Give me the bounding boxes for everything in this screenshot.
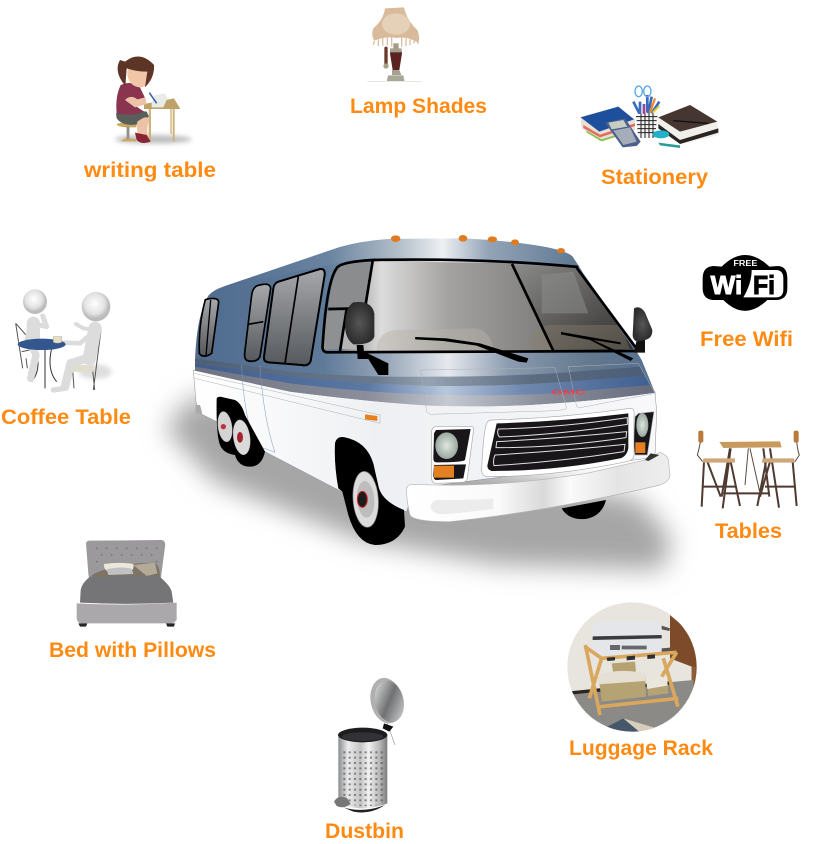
right mirror	[633, 307, 652, 353]
side marker	[365, 414, 377, 421]
icon: circular photo of luggage rack	[567, 602, 697, 732]
van ground shadow	[165, 395, 672, 570]
suitcase	[592, 621, 662, 656]
left mirror	[345, 302, 388, 375]
item: lamp shades	[350, 7, 487, 118]
illustration: GMC motorhome van	[193, 235, 670, 545]
icon: bar table and two stools	[697, 431, 799, 508]
right headlight	[634, 412, 654, 455]
item: tables	[697, 431, 799, 543]
front bumper	[407, 452, 670, 522]
label: Luggage Rack	[569, 736, 713, 760]
windshield glass	[343, 261, 553, 352]
wipers	[415, 332, 633, 363]
lower white body	[193, 370, 657, 512]
left headlight	[432, 427, 474, 483]
rear window	[199, 298, 219, 356]
item: luggage rack	[567, 602, 713, 760]
roof highlight	[223, 238, 577, 287]
GMC badge: GMC	[551, 387, 587, 396]
label: Stationery	[601, 165, 708, 189]
item: dustbin	[325, 675, 408, 843]
icon: free wifi logo: Wi	[711, 270, 742, 300]
roof marker lights	[391, 235, 565, 253]
item: coffee table	[1, 289, 131, 429]
cab interior seats	[377, 272, 630, 351]
side door window	[245, 284, 271, 361]
label: Tables	[715, 519, 782, 543]
icon: free wifi logo: FREE	[733, 259, 758, 268]
icon: two figures at cafe table	[16, 289, 112, 390]
icon: free wifi logo	[703, 255, 787, 311]
windshield frame	[322, 260, 638, 352]
baskets	[612, 662, 636, 673]
side windows	[264, 269, 325, 365]
item: writing table	[83, 57, 216, 182]
upper body	[195, 238, 655, 406]
icon: notebooks, calculator, pen cup	[581, 86, 719, 148]
label: Free Wifi	[700, 327, 793, 351]
rear wheels	[216, 397, 265, 467]
icon: upholstered bed	[77, 540, 177, 627]
label: Coffee Table	[1, 405, 131, 429]
label: Dustbin	[325, 819, 404, 843]
front-right wheel	[562, 500, 606, 519]
body trim lines	[194, 363, 655, 452]
icon: girl at writing table	[115, 57, 192, 144]
grille	[482, 408, 634, 477]
side stripes	[195, 358, 655, 406]
item: free wifi	[700, 255, 793, 351]
item: bed with pillows	[49, 540, 216, 662]
front-left wheel	[335, 437, 405, 545]
item: stationery	[581, 86, 719, 189]
icon: fringed table lamp	[367, 7, 422, 82]
label: writing table	[83, 158, 216, 182]
door window	[328, 262, 371, 308]
icon: steel pedal dustbin	[334, 675, 408, 812]
label: Lamp Shades	[350, 94, 487, 118]
label: Bed with Pillows	[49, 638, 216, 662]
icon: free wifi logo: Fi	[753, 270, 775, 300]
rack frame	[585, 645, 678, 715]
rear bumper end	[196, 405, 202, 414]
